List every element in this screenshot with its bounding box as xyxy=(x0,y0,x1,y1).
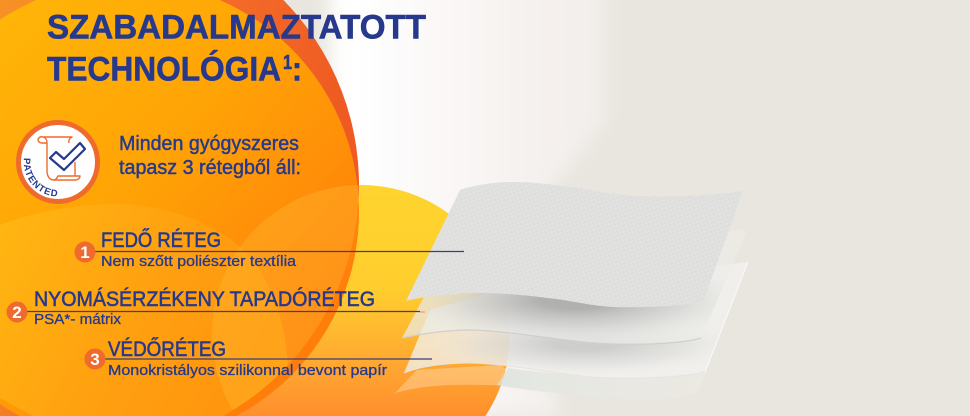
icon: scroll xyxy=(38,137,80,180)
title: : xyxy=(292,50,302,88)
badge label: PATENTED xyxy=(24,158,58,196)
label 2: adhesive layer: NYOMÁSÉRZÉKENY TAPADÓRÉTEG xyxy=(34,288,375,311)
layer: reflection tint xyxy=(497,368,707,400)
label 2: adhesive layer: 2 xyxy=(12,303,22,322)
layer: reflection xyxy=(395,365,512,393)
title: TECHNOLÓGIA xyxy=(47,50,281,88)
label 3: protective layer xyxy=(84,338,432,379)
label 1: backing layer: FEDŐ RÉTEG xyxy=(101,229,221,252)
infographic canvas xyxy=(0,0,748,416)
label 3: protective layer: 3 xyxy=(90,350,100,369)
label 2: adhesive layer xyxy=(6,288,425,328)
intro text: Minden gyógyszeres xyxy=(119,133,299,155)
label 3: protective layer: Monokristályos szilikonnal bevont papír xyxy=(108,363,387,379)
intro text: tapasz 3 rétegből áll: xyxy=(119,157,301,179)
icon: check mark xyxy=(50,143,85,170)
label 2: adhesive layer: PSA*- mátrix xyxy=(34,312,122,328)
icon: patented badge xyxy=(16,120,100,204)
label 1: backing layer xyxy=(74,229,464,270)
label 1: backing layer: 1 xyxy=(80,243,90,262)
label 1: backing layer: Nem szőtt poliészter textília xyxy=(101,254,297,270)
intro text xyxy=(119,133,301,179)
label 3: protective layer: VÉDŐRÉTEG xyxy=(108,338,226,361)
patch: three layer stack xyxy=(395,182,750,400)
title: SZABADALMAZTATOTT xyxy=(47,8,426,46)
decorative orange circles xyxy=(0,0,510,416)
layer: backing fabric xyxy=(406,182,743,307)
layer: adhesive matrix xyxy=(402,286,720,344)
layer: protective liner xyxy=(400,262,750,380)
title xyxy=(47,8,426,88)
title: 1 xyxy=(283,52,292,74)
